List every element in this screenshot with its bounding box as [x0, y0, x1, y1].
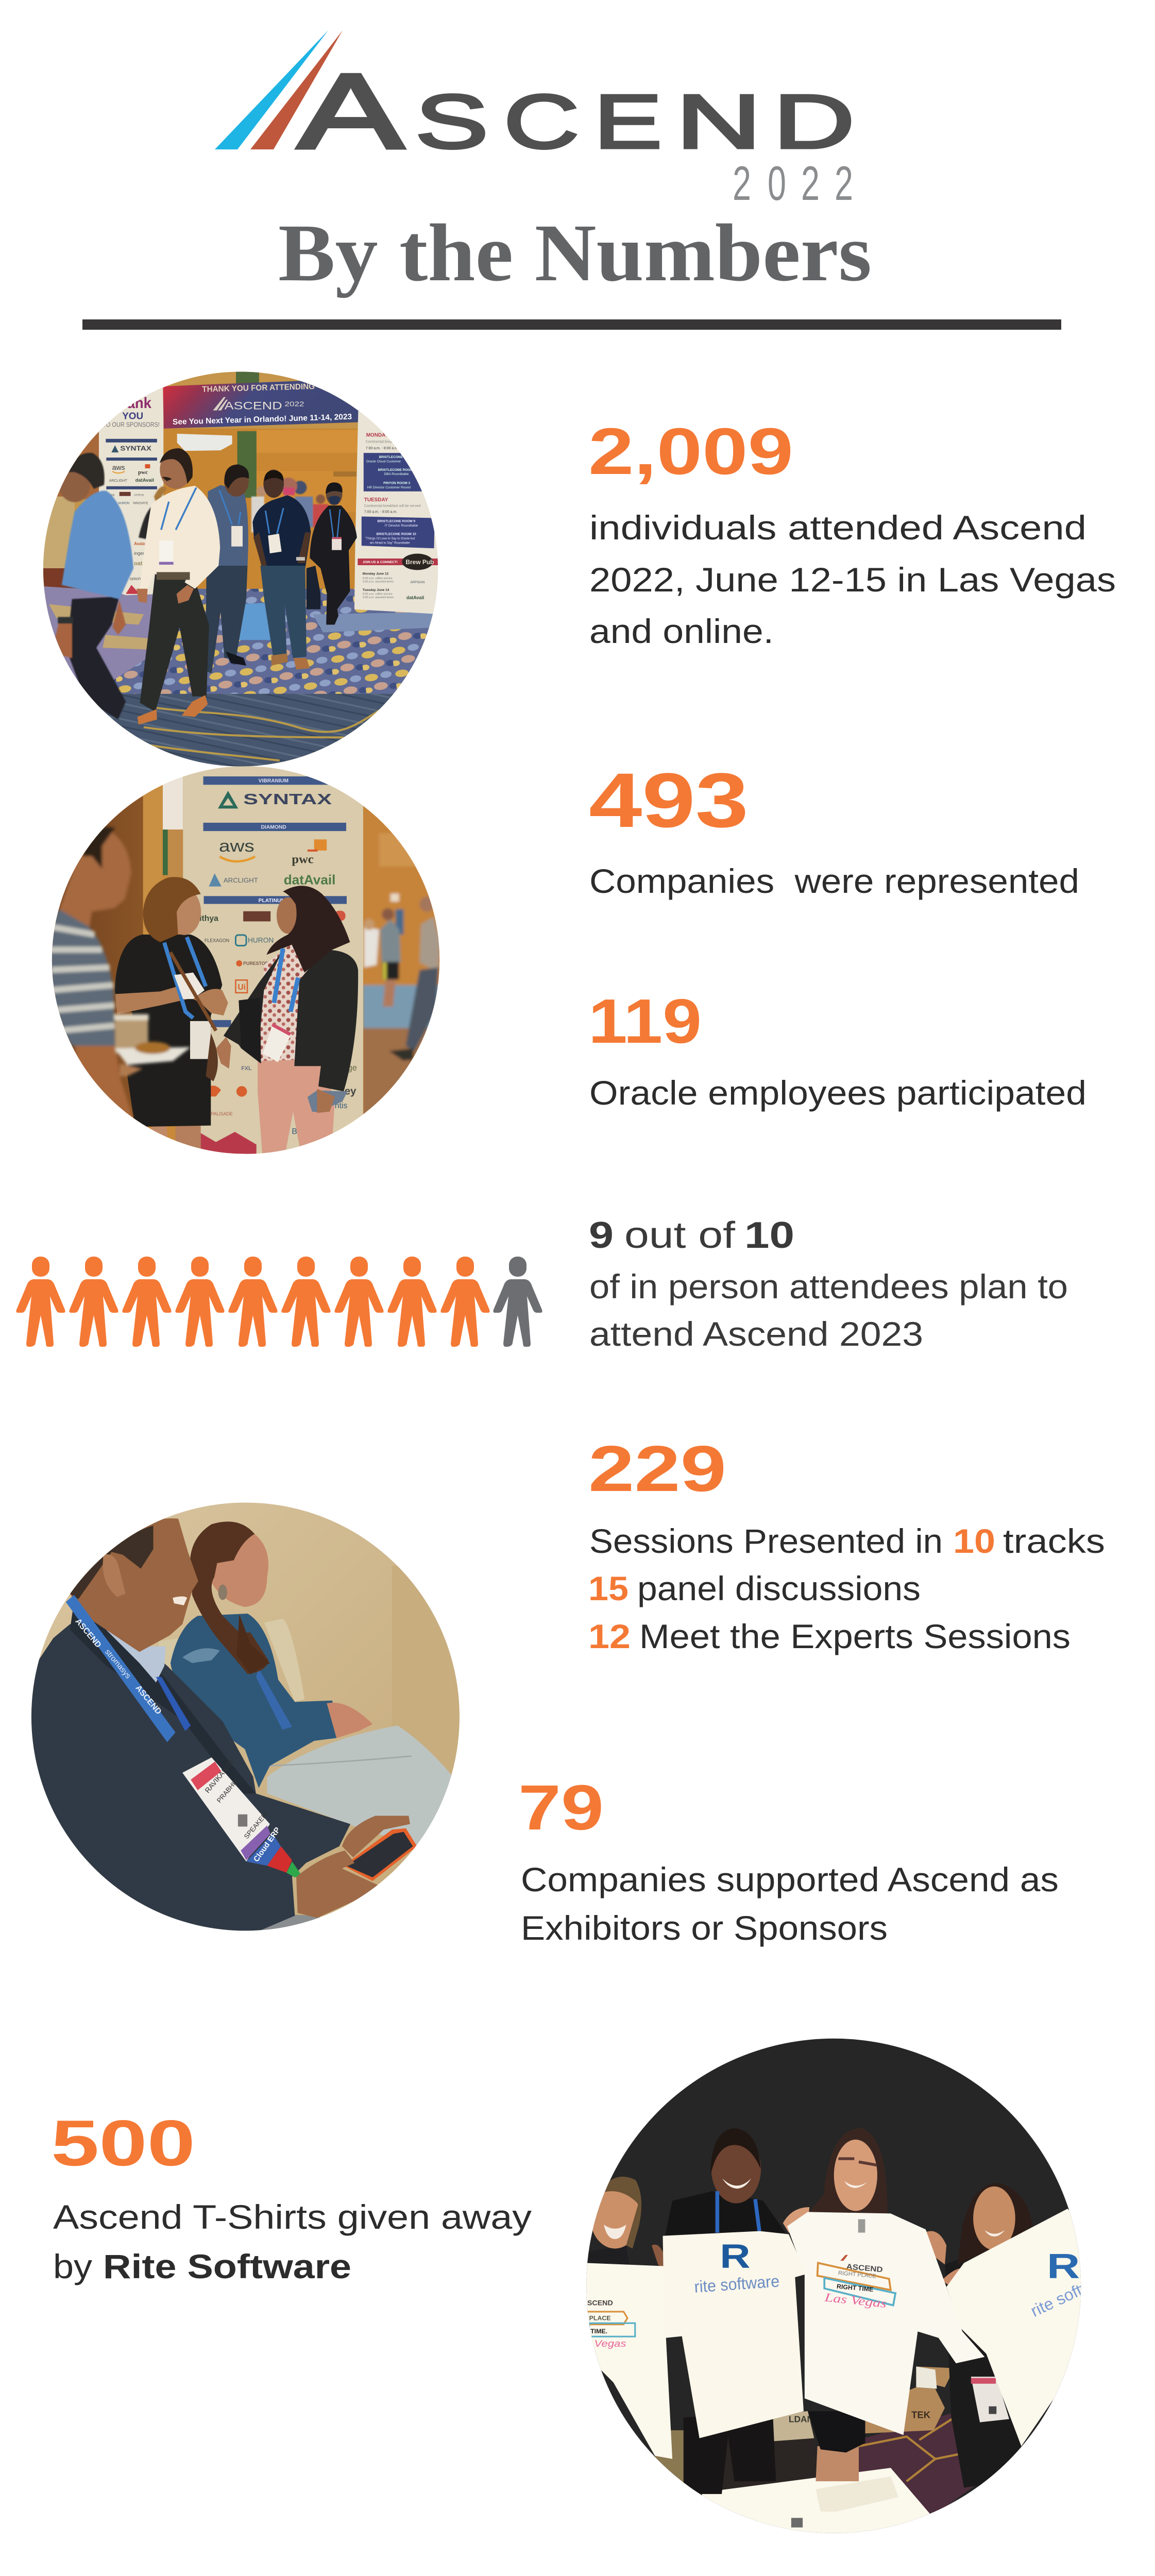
- person: man in white shirt: [137, 448, 220, 724]
- scene: right schedule panel: 7:00 a.m. - 8:00 a.m.: [364, 511, 397, 514]
- scene: right schedule panel: DBA Roundtable: [384, 472, 409, 476]
- scene: sponsor board: HURON: [248, 937, 274, 944]
- stat: attendance: [588, 415, 1116, 650]
- text: panel discussions: 15: [588, 1569, 629, 1607]
- person: man in blue shirt, foreground: [55, 453, 133, 720]
- scene: right schedule panel: Continental breakfast: [366, 440, 400, 444]
- scene: sponsor board: SYNTAX: [243, 791, 332, 808]
- scene: left sponsor panel: ank: [127, 395, 151, 412]
- photo: attendees walking through the hall: [41, 368, 443, 771]
- scene: left sponsor panel: ARCLIGHT: [109, 479, 128, 483]
- number: 500: 500: [51, 2107, 195, 2179]
- scene: left sponsor panel: [99, 386, 163, 595]
- text: t-shirts description: [53, 2198, 532, 2285]
- element: shirt left: [585, 2263, 682, 2459]
- scene: sponsor board: BI: [292, 1127, 299, 1136]
- logo wordmark: [298, 52, 855, 171]
- person: woman far right: [942, 2183, 1032, 2487]
- scene: sponsor board: [183, 762, 363, 1159]
- element: speaker badge: Cloud ERP: [252, 1826, 282, 1863]
- text: t-shirts description: by: [53, 2247, 92, 2285]
- icon: grey person: [493, 1257, 542, 1347]
- element: Ascend event shirt: RIGHT TIME: [836, 2283, 874, 2293]
- scene: sponsor board: ithya: [199, 914, 218, 923]
- scene: sponsor board: ARCLIGHT: [224, 876, 258, 884]
- logo: Ascend 2022: [215, 30, 855, 210]
- element: lanyard: ASCEND: [133, 1683, 163, 1716]
- element: rite software shirt: [663, 2231, 806, 2438]
- scene: sponsor board: aws: [219, 837, 254, 855]
- text: sponsors description: Exhibitors or Sponsors: [521, 1909, 888, 1947]
- text: plan to attend description: of in person attendees plan to: [589, 1267, 1068, 1306]
- text: attendance description: individuals attended Ascend: [589, 509, 1086, 547]
- scene: left sponsor panel: ingentis: [134, 551, 150, 556]
- element: speaker badge: PRABHU: [215, 1778, 239, 1804]
- scene: table, boxes and carpet: [649, 2366, 977, 2535]
- text: plan to attend description: attend Ascend 2023: [589, 1315, 923, 1353]
- scene: sponsor board: PURESTOR: [243, 961, 269, 966]
- number: 493: 493: [589, 757, 749, 843]
- logo year: 0: [768, 156, 786, 210]
- element: shirt right: rite software: [1028, 2265, 1117, 2320]
- element: speaker badge: [182, 1757, 302, 1877]
- scene: right schedule panel: MONDAY: [366, 432, 388, 438]
- logo wordmark: A: [298, 52, 403, 171]
- text: meet the experts: 12: [588, 1617, 631, 1655]
- element: shirt left: SCEND: [587, 2299, 613, 2308]
- text: sessions presented: Sessions Presented in: [589, 1522, 943, 1560]
- element: Ascend event shirt: RIGHT PLACE: [838, 2270, 876, 2280]
- element: Ascend event shirt: ASCEND: [846, 2263, 884, 2274]
- heading: 9 out of 10: [589, 1215, 794, 1256]
- scene: Thank you banner: ASCEND: [225, 400, 282, 412]
- stat: t-shirts: [51, 2107, 532, 2285]
- stat: sessions: [588, 1432, 1105, 1655]
- element: rite software shirt: R: [720, 2238, 751, 2275]
- scene: left sponsor panel: SYNTAX: [120, 445, 151, 452]
- scene: right schedule panel: BRISTLECONE ROOM: [379, 455, 414, 459]
- scene: left sponsor panel: pwc: [138, 469, 148, 476]
- person: man in grey-blue shirt: [205, 465, 249, 673]
- scene: sponsor board: DIAMOND: [261, 825, 286, 831]
- icon: orange people: [16, 1257, 490, 1347]
- logo year: 2: [733, 156, 751, 210]
- logo wordmark: C: [504, 79, 579, 164]
- scene: Thank you banner: 2022: [285, 400, 304, 408]
- number: 79: 79: [518, 1772, 604, 1843]
- heading: 9 out of 10: 10: [744, 1215, 794, 1256]
- scene: right schedule panel: HR Director Customer Round: [367, 486, 411, 489]
- photo: volunteers holding Ascend t-shirts: [585, 2035, 1117, 2535]
- element: rite software shirt: rite software: [693, 2272, 780, 2296]
- scene: right schedule panel: TUESDAY: [364, 497, 388, 503]
- scene: right schedule panel: Brew Pub: [405, 558, 434, 566]
- icon row: nine of ten people: [16, 1257, 542, 1347]
- logo wordmark: S: [415, 79, 488, 164]
- scene: right schedule panel: PINYON ROOM 3: [383, 481, 410, 485]
- element: lanyard: ASCEND: [73, 1617, 103, 1650]
- logo year: 2: [835, 156, 853, 210]
- scene: right schedule panel: 9:30 a.m. coffee service: [363, 577, 393, 580]
- scene: right schedule panel: 9:30 a.m. coffee service: [363, 593, 393, 596]
- scene: sponsor board: PALISADE: [211, 1111, 233, 1116]
- text: sessions presented: [589, 1522, 1105, 1560]
- scene: left sponsor panel: HURON: [118, 502, 129, 505]
- scene: left sponsor panel: datAvail: [135, 478, 154, 483]
- stat: companies represented: [589, 757, 1079, 900]
- icon: red logo stripe: [250, 30, 343, 149]
- scene: left sponsor panel: splashBI: [130, 576, 144, 581]
- scene: right schedule panel: Continental breakfast will be served: [364, 504, 421, 508]
- person: woman in denim: [171, 1521, 453, 1846]
- text: t-shirts description: Rite Software: [103, 2247, 351, 2285]
- title: By the Numbers: [278, 208, 872, 298]
- scene: right schedule panel: Monday June 13: [363, 572, 388, 575]
- text: attendance description: 2022, June 12-15 in Las Vegas: [589, 561, 1116, 599]
- scene: sponsor board: pwc: [292, 852, 314, 866]
- element: shirt left: Vegas: [595, 2338, 626, 2349]
- element: shirt left: TIME.: [590, 2328, 607, 2335]
- icon: blue logo stripe: [215, 30, 328, 149]
- scene: left sponsor panel: ithya: [108, 494, 115, 497]
- scene: left sponsor panel: INNOVATE: [133, 502, 148, 505]
- scene: sponsor board: ntis: [335, 1101, 347, 1110]
- scene: right schedule panel: BRISTLECONE ROOM: [378, 468, 413, 472]
- scene: left sponsor panel: aws: [112, 463, 125, 471]
- text: sponsors description: Companies supported Ascend as: [521, 1860, 1059, 1899]
- person: woman with curly hair: [115, 877, 228, 1159]
- scene: left sponsor panel: Avalara: [134, 541, 149, 546]
- scene: wood wall: [164, 429, 359, 592]
- scene: sponsor board: Ui: [237, 983, 246, 992]
- logo year: 2: [801, 156, 820, 210]
- element: shirt right: R: [1047, 2246, 1080, 2285]
- scene: sponsor board: FLEXAGON: [205, 938, 229, 943]
- element: speaker badge: SPEAKER: [242, 1811, 268, 1840]
- scene: right schedule panel: APPSIAN: [410, 581, 425, 584]
- scene: sponsor board: ey: [345, 1085, 356, 1097]
- person: blurred man with coffee: [49, 827, 191, 1159]
- scene: right schedule panel: datAvail: [406, 595, 424, 600]
- top divider: [82, 319, 1061, 330]
- number: 229: 229: [588, 1432, 726, 1505]
- element: Ascend event shirt: [787, 2212, 984, 2435]
- scene: sponsor board: ge: [347, 1063, 357, 1073]
- text: plan to attend description: [589, 1267, 1068, 1353]
- text: panel discussions: panel discussions: [637, 1569, 921, 1607]
- scene: right schedule panel: JOIN US & CONNECT!: [363, 561, 398, 564]
- element: shirt right: [946, 2209, 1117, 2446]
- scene: left sponsor panel: oat: [134, 561, 143, 567]
- photo: two women talking by sponsor board: [49, 762, 446, 1159]
- scene: table, boxes and carpet: TEK: [911, 2410, 931, 2420]
- text: companies description: Companies were represented: [589, 862, 1079, 900]
- element: Ascend event shirt: Las Vegas: [823, 2291, 887, 2311]
- logo year: [733, 156, 853, 210]
- scene: left sponsor panel: YOU: [122, 411, 143, 421]
- element: shirt left: PLACE: [589, 2315, 611, 2322]
- scene: sponsor board: VIBRANIUM: [259, 778, 288, 784]
- person: woman in black at right: [307, 482, 357, 624]
- scene: Thank you banner: [163, 379, 359, 429]
- person: woman far left: [586, 2177, 641, 2266]
- scene: Thank you banner: THANK YOU FOR ATTENDING: [202, 382, 315, 394]
- element: lanyard: stromasys: [103, 1648, 132, 1681]
- scene: sponsor board: FXL: [241, 1065, 252, 1072]
- logo wordmark: E: [594, 79, 662, 164]
- scene: right schedule panel: IT Director Roundtable: [385, 524, 418, 528]
- heading: 9 out of 10: out of: [624, 1215, 736, 1256]
- element: lanyard: [66, 1595, 191, 1742]
- scene: right schedule panel: BRISTLECONE ROOM 10: [377, 532, 416, 536]
- person: woman with lanyard: [652, 2128, 786, 2494]
- scene: Thank you banner: See You Next Year in Orlando! June 11-14, 2023: [173, 413, 352, 427]
- text: sessions presented: 10: [953, 1522, 995, 1560]
- scene: right schedule panel: [354, 411, 443, 615]
- scene: right schedule panel: 3:00 p.m. assorted beers: [363, 596, 394, 599]
- logo wordmark: N: [676, 79, 761, 164]
- scene: right schedule panel: Tuesday June 14: [363, 588, 389, 592]
- text: Oracle employees description: Oracle employees participated: [589, 1074, 1086, 1112]
- photo: smiling speaker with phone: [28, 1499, 464, 1935]
- scene: right schedule panel: am Afraid to Say" Roundtable: [370, 541, 410, 545]
- text: sessions presented: tracks: [1003, 1522, 1105, 1560]
- scene: right schedule panel: Oracle Cloud Customer: [366, 460, 401, 464]
- scene: sponsor board: datAvail: [284, 873, 335, 888]
- scene: sponsor board: PLATINUM: [259, 898, 285, 904]
- stat: plan to attend 2023: [589, 1215, 1068, 1353]
- stat: Oracle employees: [588, 986, 1086, 1112]
- person: man in navy polo: [252, 469, 311, 670]
- text: t-shirts description: Ascend T-Shirts given away: [53, 2198, 532, 2236]
- number: 2,009: 2,009: [588, 415, 793, 488]
- scene: chair: [264, 1619, 304, 1702]
- person: man in dark blazer: [28, 1518, 417, 1935]
- person: woman in black jacket: [216, 886, 358, 1159]
- element: speaker badge: RAVIKANTH: [203, 1758, 235, 1794]
- scene: right schedule panel: 7:00 a.m. - 8:00 a.m.: [366, 447, 399, 450]
- text: attendance description: and online.: [589, 612, 774, 650]
- number: 119: 119: [588, 986, 702, 1056]
- logo wordmark: D: [773, 79, 855, 164]
- scene: right schedule panel: "Things I'd Love to Say to Oracle but: [365, 537, 415, 540]
- text: sponsors description: [521, 1860, 1059, 1947]
- scene: left sponsor panel: TO OUR SPONSORS!: [103, 421, 160, 428]
- scene: carpet: [41, 589, 443, 697]
- heading: 9 out of 10: 9: [589, 1215, 614, 1256]
- text: meet the experts: Meet the Experts Sessions: [639, 1617, 1071, 1655]
- scene: left sponsor panel: certinia: [134, 494, 144, 497]
- scene: background crowd: [139, 478, 328, 540]
- stat: exhibitors and sponsors: [518, 1772, 1059, 1947]
- scene: table, boxes and carpet: LDAN: [789, 2414, 813, 2425]
- scene: right background: [363, 806, 440, 1115]
- scene: right schedule panel: BRISTLECONE ROOM 9: [378, 519, 416, 523]
- text: attendance description: [589, 509, 1116, 650]
- scene: right schedule panel: 3:00 p.m. assorted beers: [363, 580, 394, 583]
- person: woman with glasses: [783, 2128, 946, 2481]
